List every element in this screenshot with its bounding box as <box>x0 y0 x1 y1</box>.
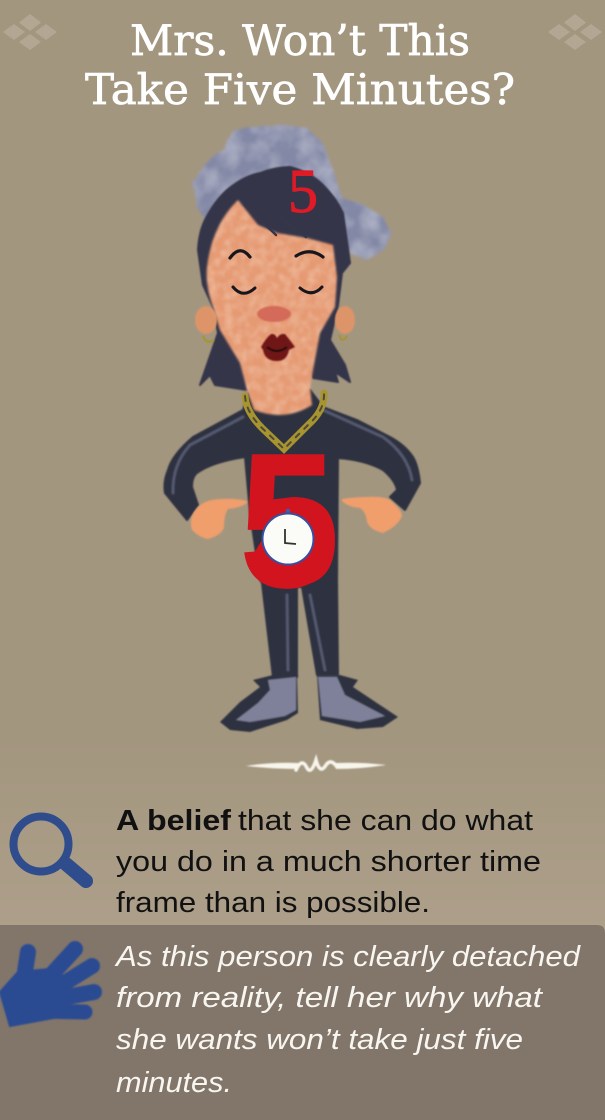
title <box>85 16 515 114</box>
character illustration <box>164 125 420 732</box>
hand icon <box>0 949 94 1026</box>
clothing highlights <box>173 410 412 670</box>
advice text <box>114 941 581 1099</box>
title: Take Five Minutes? <box>85 65 515 114</box>
advice text: minutes. <box>116 1067 232 1099</box>
hair back <box>198 167 350 390</box>
nose <box>257 306 291 322</box>
face and neck <box>207 200 337 415</box>
shoe left <box>220 675 298 732</box>
hair fringe strands <box>245 205 306 237</box>
definition text: that she can do what <box>238 805 533 837</box>
closed eyes <box>233 287 322 293</box>
decorative diamonds right <box>548 14 602 50</box>
definition: magnifier icon <box>14 816 86 881</box>
ear right <box>335 306 355 334</box>
eyebrows <box>230 251 323 258</box>
ear left <box>195 306 217 334</box>
earrings <box>203 335 347 342</box>
pointing hand right <box>342 497 402 533</box>
definition text: frame than is possible. <box>116 887 430 919</box>
small red five on cap: 5 <box>288 158 318 226</box>
definition text <box>116 805 541 919</box>
title: Mrs. Won’t This <box>130 16 470 65</box>
big red five with stopwatch: 5 <box>240 415 335 627</box>
decorative diamonds left <box>3 14 57 50</box>
lips <box>261 334 295 361</box>
stopwatch <box>262 509 314 564</box>
definition text: A belief <box>116 805 231 837</box>
squiggle divider ornament <box>246 760 386 770</box>
advice text: from reality, tell her why what <box>116 982 544 1014</box>
hat <box>193 125 391 260</box>
shoe right <box>317 675 398 729</box>
definition text: you do in a much shorter time <box>116 846 541 878</box>
advice panel <box>0 925 605 1120</box>
pointing hand left <box>191 499 247 539</box>
torso, arms and legs <box>164 390 420 677</box>
advice text: As this person is clearly detached <box>114 941 581 973</box>
gold chain necklace <box>245 393 324 449</box>
advice text: she wants won’t take just five <box>116 1024 523 1056</box>
